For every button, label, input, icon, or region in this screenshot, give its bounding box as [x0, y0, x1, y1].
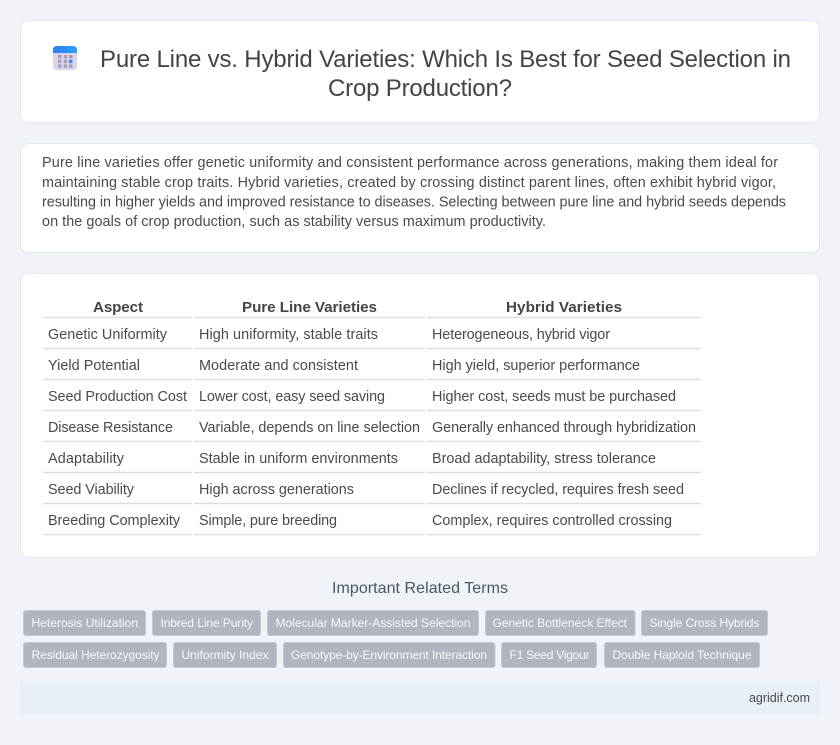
row: disease resistance: Variable, depends on line selection [199, 420, 420, 436]
tag: heterosis utilization [24, 610, 146, 636]
row: adaptability [43, 451, 701, 472]
table header: Hybrid Varieties [506, 299, 622, 316]
row: disease resistance: Generally enhanced through hybridization [432, 420, 696, 436]
row: seed viability: High across generations [199, 482, 354, 498]
row: disease resistance: Disease Resistance [48, 420, 173, 436]
footer [20, 681, 820, 715]
tag: single cross hybrids: Single Cross Hybrids [650, 616, 760, 630]
table: comparison [43, 299, 701, 534]
text block: introduction: on the goals of crop production, such as stability versus maximum productivity. [42, 214, 546, 230]
tag: molecular marker-assisted selection: Molecular Marker-Assisted Selection [276, 616, 470, 630]
tag: f1 seed vigour [502, 642, 596, 668]
row: yield potential [43, 358, 701, 380]
text block: introduction [42, 155, 786, 230]
table header: Pure Line Varieties [242, 299, 377, 316]
row: yield potential: Moderate and consistent [199, 358, 358, 374]
tag: inbred line purity: Inbred Line Purity [160, 616, 253, 630]
heading: important related terms: Important Related Terms [332, 580, 508, 597]
tag: double haploid technique: Double Haploid Technique [612, 648, 752, 662]
tag list: related terms [24, 610, 768, 668]
row: breeding complexity [43, 513, 701, 534]
text block: introduction: resulting in higher yields and improved resistance to diseases. Selecting between pure line and hybrid seeds depends [42, 194, 786, 210]
table header: Aspect [93, 299, 143, 316]
row: seed production cost: Seed Production Cost [48, 389, 187, 405]
tag: uniformity index [174, 642, 276, 668]
tag: molecular marker-assisted selection [268, 610, 478, 636]
row: yield potential: Yield Potential [48, 358, 140, 374]
tag: residual heterozygosity: Residual Heterozygosity [32, 648, 160, 662]
text block: introduction: maintaining stable crop traits. Hybrid varieties, created by crossing distinct parent lines, often exhibit hybrid vigor, [42, 175, 776, 191]
panel: title card [20, 20, 820, 122]
icon: calendar [53, 46, 77, 70]
tag: genotype-by-environment interaction [284, 642, 495, 668]
row: seed viability: Declines if recycled, requires fresh seed [432, 482, 684, 498]
panel: comparison table card [20, 274, 820, 558]
row: seed production cost [43, 389, 701, 410]
tag: inbred line purity [152, 610, 260, 636]
row: seed production cost: Higher cost, seeds must be purchased [432, 389, 676, 405]
row: breeding complexity: Complex, requires controlled crossing [432, 513, 672, 529]
row: genetic uniformity: High uniformity, stable traits [199, 327, 378, 343]
panel: introduction card [20, 144, 820, 252]
row: disease resistance [43, 420, 701, 442]
row: yield potential: High yield, superior performance [432, 358, 640, 374]
row: seed viability [43, 482, 701, 504]
tag: residual heterozygosity [24, 642, 166, 668]
title: Crop Production? [328, 75, 512, 102]
tag: double haploid technique [604, 642, 760, 668]
tag: uniformity index: Uniformity Index [182, 648, 268, 662]
tag: genetic bottleneck effect [486, 610, 635, 636]
title [100, 46, 791, 102]
tag: heterosis utilization: Heterosis Utilization [32, 616, 138, 630]
tag: single cross hybrids [642, 610, 768, 636]
row: seed viability: Seed Viability [48, 482, 135, 498]
row: genetic uniformity [43, 327, 701, 348]
tag: genotype-by-environment interaction: Genotype-by-Environment Interaction [291, 648, 487, 662]
row: genetic uniformity: Genetic Uniformity [48, 327, 168, 343]
row: seed production cost: Lower cost, easy seed saving [199, 389, 385, 405]
table header [43, 299, 701, 318]
row: breeding complexity: Breeding Complexity [48, 513, 181, 529]
row: adaptability: Adaptability [48, 451, 125, 467]
text block: introduction: Pure line varieties offer genetic uniformity and consistent performance across generations, making them ideal for [42, 155, 778, 171]
footer: agridif.com [749, 691, 810, 705]
row: adaptability: Broad adaptability, stress tolerance [432, 451, 656, 467]
row: genetic uniformity: Heterogeneous, hybrid vigor [432, 327, 610, 343]
tag: genetic bottleneck effect: Genetic Bottleneck Effect [492, 616, 628, 630]
row: breeding complexity: Simple, pure breeding [199, 513, 337, 529]
title: Pure Line vs. Hybrid Varieties: Which Is Best for Seed Selection in [100, 46, 791, 73]
tag: f1 seed vigour: F1 Seed Vigour [510, 648, 590, 662]
row: adaptability: Stable in uniform environments [199, 451, 398, 467]
